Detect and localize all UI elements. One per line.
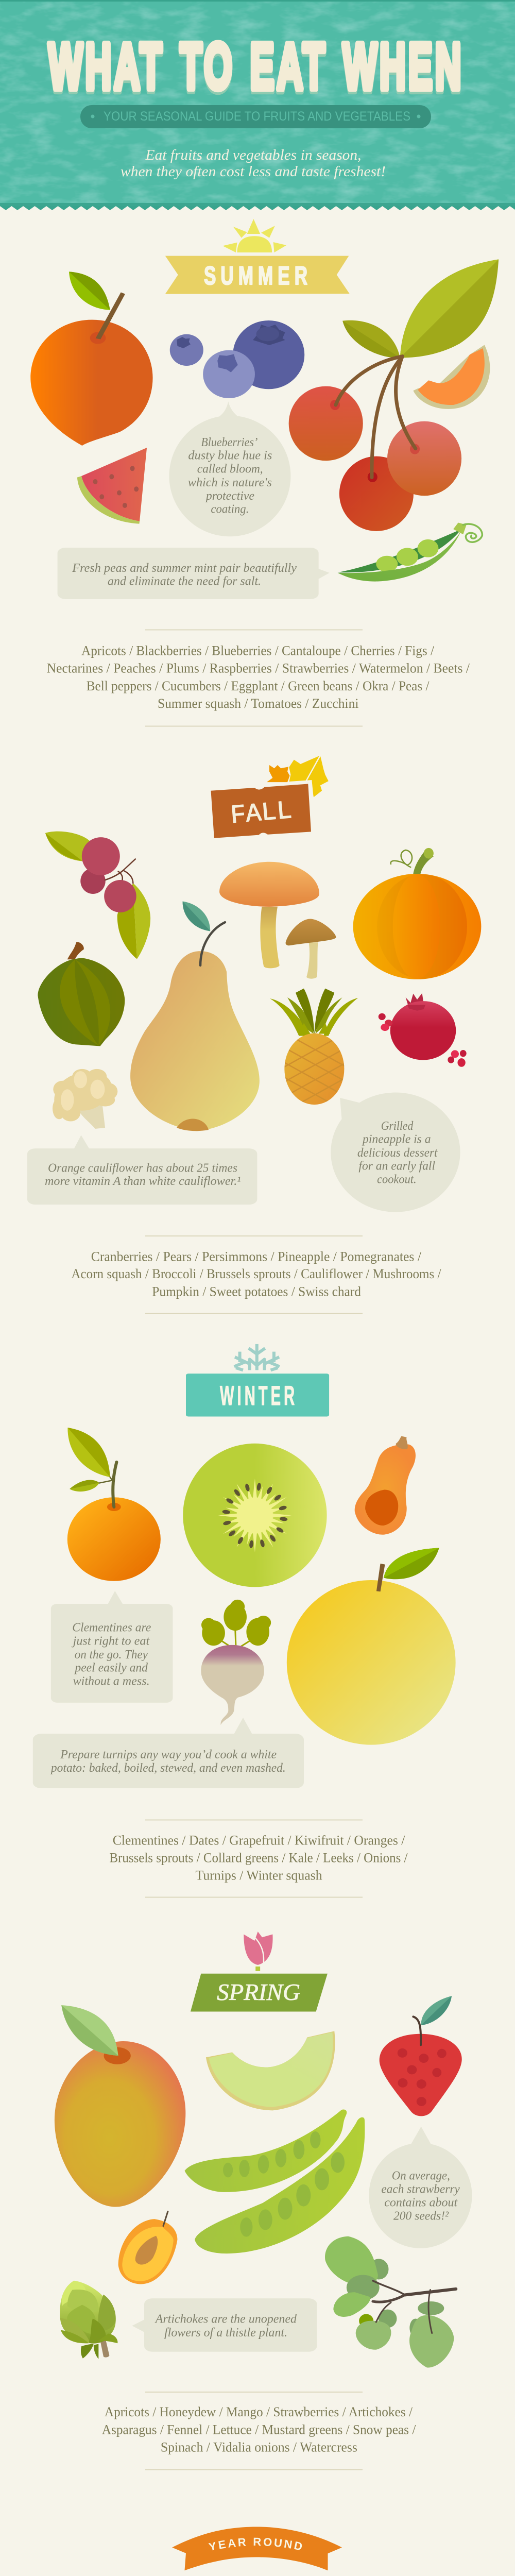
callout: turnips: Prepare turnips any way you’d cook a white [60, 1748, 277, 1761]
heading ribbon: summer [165, 256, 350, 294]
grapefruit [287, 1548, 456, 1745]
list: fall produce: Acorn squash / Broccoli / Brussels sprouts / Cauliflower / Mushrooms / [71, 1266, 441, 1281]
callout: pineapple: for an early fall [358, 1160, 435, 1173]
peach [30, 272, 153, 446]
callout: artichokes: Artichokes are the unopened [154, 2312, 297, 2326]
list: winter produce [109, 1833, 408, 1883]
callout: peas: and eliminate the need for salt. [108, 575, 261, 588]
callout: strawberry: On average, [392, 2169, 450, 2182]
callout: peas [58, 548, 330, 599]
acorn squash [38, 942, 125, 1046]
strawberry [380, 1996, 462, 2116]
callout: cauliflower: Orange cauliflower has about 25 times [48, 1162, 237, 1175]
list: spring produce: Asparagus / Fennel / Lettuce / Mustard greens / Snow peas / [102, 2422, 416, 2437]
list: summer produce: Apricots / Blackberries / Blueberries / Cantaloupe / Cherries / Figs / [81, 643, 435, 658]
callout: strawberry: contains about [384, 2196, 458, 2210]
list: spring produce: Spinach / Vidalia onions / Watercress [161, 2440, 357, 2454]
list: fall produce [71, 1249, 441, 1299]
icon: tulip [244, 1931, 273, 1971]
pomegranate [379, 993, 467, 1067]
pear [130, 901, 260, 1131]
callout: pineapple: delicious dessert [357, 1146, 438, 1160]
callout: blueberries [169, 401, 290, 536]
callout: clementines: without a mess. [73, 1674, 150, 1688]
apricot [118, 2211, 177, 2284]
panel: spring [55, 1931, 472, 2470]
heading badge: fall [211, 781, 314, 838]
callout: strawberry: each strawberry [381, 2183, 460, 2196]
callout: peas: Fresh peas and summer mint pair beautifully [72, 562, 297, 575]
callout: artichokes: flowers of a thistle plant. [164, 2326, 287, 2340]
callout: clementines [51, 1591, 173, 1703]
list: spring produce [102, 2404, 416, 2454]
callout: pineapple: cookout. [377, 1173, 417, 1187]
heading banner: winter [186, 1374, 329, 1417]
subtitle pill: YOUR SEASONAL GUIDE TO FRUITS AND VEGETABLES [104, 109, 410, 124]
list: winter produce: Turnips / Winter squash [196, 1868, 322, 1883]
list: summer produce: Nectarines / Peaches / Plums / Raspberries / Strawberries / Watermelon / Beets / [47, 660, 470, 676]
cantaloupe [413, 345, 490, 409]
callout: pineapple [331, 1093, 460, 1212]
snow peas [184, 2110, 365, 2253]
mushrooms [219, 862, 336, 979]
heading ribbon: year round [172, 2527, 342, 2571]
callout: clementines: Clementines are [72, 1621, 151, 1634]
panel: year round [172, 2527, 342, 2571]
callout: blueberries: which is nature's [188, 476, 272, 489]
icon: snowflake [234, 1344, 280, 1370]
callout: clementines: just right to eat [72, 1634, 150, 1648]
list: fall produce: Pumpkin / Sweet potatoes / Swiss chard [152, 1284, 361, 1299]
watermelon [77, 448, 147, 524]
callout: pineapple: Grilled [381, 1120, 414, 1133]
list: summer produce [47, 643, 470, 711]
heading ribbon: year round: YEAR ROUND [208, 2538, 302, 2550]
callout: clementines: peel easily and [74, 1662, 148, 1675]
callout: turnips: potato: baked, boiled, stewed, and even mashed. [50, 1761, 286, 1775]
heading banner: spring [191, 1974, 328, 2011]
callout: artichokes [132, 2298, 317, 2352]
turnip [201, 1600, 271, 1725]
callout: pineapple: pineapple is a [362, 1133, 431, 1146]
artichoke [60, 2281, 117, 2359]
heading ribbon: summer: SUMMER [204, 262, 312, 291]
list: summer produce: Summer squash / Tomatoes / Zucchini [158, 696, 358, 711]
pea pod [338, 523, 482, 582]
subtitle pill [80, 105, 431, 128]
butternut squash [355, 1436, 416, 1535]
list: winter produce: Brussels sprouts / Collard greens / Kale / Leeks / Onions / [109, 1851, 408, 1866]
callout: cauliflower [27, 1135, 257, 1205]
spinach [325, 2236, 456, 2368]
list: spring produce: Apricots / Honeydew / Mango / Strawberries / Artichokes / [105, 2404, 413, 2419]
grapes and leaves [45, 832, 150, 959]
mango [55, 2005, 185, 2207]
intro text: when they often cost less and taste freshest! [121, 164, 386, 180]
header panel [0, 0, 515, 210]
icon: sun [222, 219, 286, 252]
honeydew slice [206, 2031, 335, 2110]
blueberries [170, 320, 304, 398]
intro text: Eat fruits and vegetables in season, [145, 147, 362, 163]
cauliflower [53, 1069, 117, 1129]
callout: blueberries: dusty blue hue is [188, 449, 272, 463]
list: winter produce: Clementines / Dates / Grapefruit / Kiwifruit / Oranges / [113, 1833, 405, 1848]
pumpkin [353, 848, 481, 979]
callout: strawberry [369, 2127, 472, 2248]
callout: cauliflower: more vitamin A than white cauliflower.¹ [45, 1175, 241, 1188]
clementine [67, 1428, 161, 1581]
callout: blueberries: Blueberries’ [201, 436, 258, 449]
panel: winter [33, 1344, 456, 1898]
pineapple [270, 989, 358, 1113]
list: summer produce: Bell peppers / Cucumbers / Eggplant / Green beans / Okra / Peas / [87, 679, 430, 693]
kiwi [183, 1444, 327, 1587]
title: WHAT TO EAT WHEN [48, 30, 464, 103]
heading badge: fall: FALL [229, 796, 294, 831]
callout: blueberries: protective [205, 489, 254, 503]
callout: blueberries: coating. [211, 503, 249, 516]
cherries [289, 259, 499, 531]
icon: autumn leaves [267, 755, 329, 797]
panel: fall [27, 755, 481, 1314]
heading banner: spring: SPRING [217, 1979, 300, 2005]
callout: turnips [33, 1718, 304, 1788]
callout: clementines: on the go. They [75, 1648, 148, 1662]
callout: strawberry: 200 seeds!² [393, 2209, 449, 2223]
callout: blueberries: called bloom, [197, 463, 263, 476]
heading banner: winter: WINTER [220, 1381, 298, 1411]
intro text [121, 147, 386, 180]
panel: summer [30, 219, 499, 726]
list: fall produce: Cranberries / Pears / Persimmons / Pineapple / Pomegranates / [91, 1249, 422, 1264]
